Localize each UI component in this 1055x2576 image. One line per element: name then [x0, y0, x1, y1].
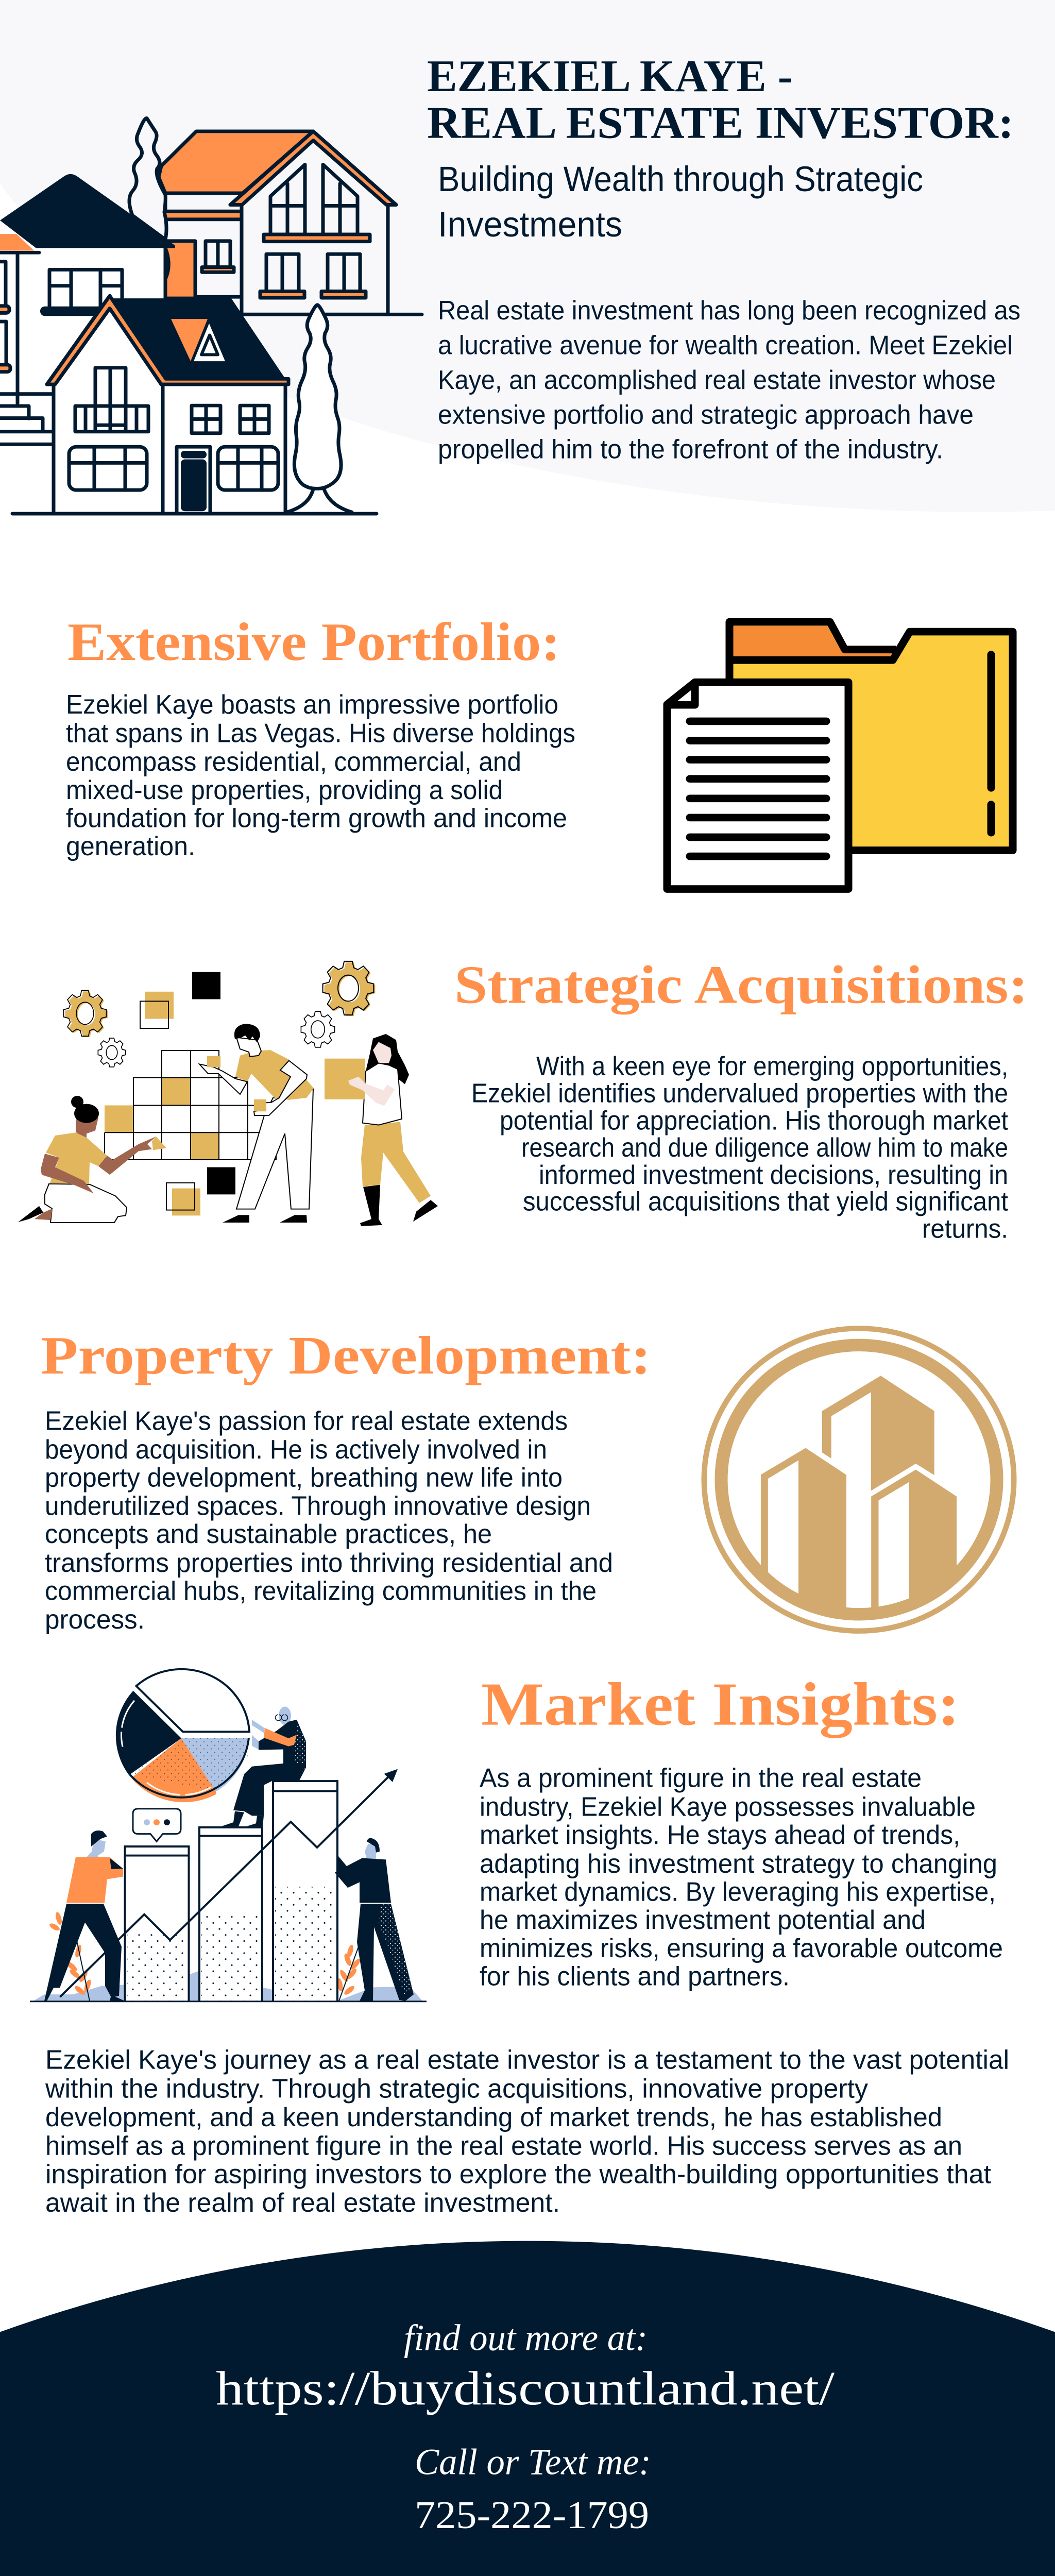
text: property development: property development, breathing new life into	[45, 1463, 563, 1493]
text: strategic acquisitions	[471, 1052, 1008, 1244]
conclusion paragraph: Ezekiel Kaye's journey as a real estate investor is a testament to the vast potential	[45, 2045, 1009, 2075]
text: extensive portfolio: generation.	[66, 832, 195, 861]
intro paragraph: Real estate investment has long been recognized as	[438, 296, 1020, 326]
heading: property development: Property Development:	[41, 1326, 651, 1385]
heading: market insights: Market Insights:	[481, 1671, 960, 1738]
sitting man	[222, 1706, 306, 1826]
left house with navy roof	[0, 174, 175, 444]
title: REAL ESTATE INVESTOR:	[427, 98, 1014, 148]
icon: folder and document	[667, 622, 1013, 889]
bar columns	[30, 1781, 427, 2002]
block grid	[105, 1050, 276, 1160]
heading: extensive portfolio: Extensive Portfolio:	[67, 612, 560, 672]
pie chart	[117, 1669, 249, 1802]
intro paragraph: Kaye, an accomplished real estate investor whose	[438, 365, 996, 395]
conclusion paragraph: inspiration for aspiring investors to explore the wealth-building opportunities that	[45, 2160, 991, 2189]
text: extensive portfolio: foundation for long-term growth and income	[66, 804, 567, 833]
text: property development: process.	[45, 1605, 145, 1635]
text: market insights: market dynamics. By leveraging his expertise,	[480, 1877, 996, 1907]
illustration: houses	[0, 118, 422, 514]
text: strategic acquisitions: With a keen eye for emerging opportunities,	[536, 1052, 1008, 1081]
conclusion paragraph	[45, 2045, 1009, 2218]
text: extensive portfolio: encompass residential, commercial, and	[66, 748, 521, 777]
text: market insights: market insights. He stays ahead of trends,	[480, 1821, 960, 1850]
footer text: phone number: 725-222-1799	[415, 2493, 649, 2537]
illustration: team building blocks	[18, 961, 438, 1226]
text: extensive portfolio: that spans in Las Vegas. His diverse holdings	[66, 719, 575, 748]
left man	[44, 1831, 125, 2001]
text: strategic acquisitions: returns.	[922, 1214, 1008, 1244]
speech bubble	[133, 1809, 181, 1841]
subtitle	[438, 159, 923, 244]
text: market insights: minimizes risks, ensuring a favorable outcome	[480, 1934, 1003, 1963]
footer panel	[0, 2241, 1055, 2576]
front tree	[294, 305, 341, 488]
text: market insights: for his clients and partners.	[480, 1962, 790, 1991]
footer text: website url: https://buydiscountland.net/	[216, 2361, 835, 2415]
front house	[47, 296, 288, 514]
text: strategic acquisitions: potential for appreciation. His thorough market	[500, 1106, 1008, 1136]
intro paragraph: a lucrative avenue for wealth creation. Meet Ezekiel	[438, 331, 1013, 360]
conclusion paragraph: himself as a prominent figure in the real estate world. His success serves as an	[45, 2131, 962, 2161]
text: property development: underutilized spaces. Through innovative design	[45, 1492, 591, 1521]
text: strategic acquisitions: successful acquisitions that yield significant	[523, 1187, 1008, 1216]
text: property development: beyond acquisition. He is actively involved in	[45, 1435, 547, 1465]
back house with orange roof	[159, 131, 422, 314]
intro paragraph	[438, 296, 1020, 465]
arrow: rising trend line	[60, 1769, 398, 1997]
text: property development: commercial hubs, revitalizing communities in the	[45, 1577, 597, 1606]
text: property development: Ezekiel Kaye's passion for real estate extends	[45, 1406, 568, 1436]
floating squares	[140, 972, 235, 1215]
kneeling woman	[18, 1096, 166, 1223]
gears	[64, 961, 375, 1067]
right man	[335, 1838, 414, 2001]
text: market insights: As a prominent figure in the real estate	[480, 1764, 922, 1793]
text: property development: concepts and sustainable practices, he	[45, 1520, 492, 1549]
intro paragraph: propelled him to the forefront of the industry.	[438, 435, 943, 465]
title	[427, 52, 1014, 148]
text: extensive portfolio	[66, 690, 575, 861]
illustration: market chart with people	[30, 1669, 427, 2002]
footer text: find out more: find out more at:	[404, 2317, 648, 2358]
text: market insights: he maximizes investment potential and	[480, 1906, 926, 1935]
text: property development: transforms properties into thriving residential and	[45, 1548, 613, 1578]
text: market insights: adapting his investment strategy to changing	[480, 1849, 997, 1879]
heading: strategic acquisitions: Strategic Acquisitions:	[454, 955, 1028, 1014]
subtitle: Building Wealth through Strategic	[438, 159, 923, 199]
text: market insights	[480, 1764, 1003, 1991]
standing woman	[325, 1034, 438, 1226]
text: strategic acquisitions: informed investment decisions, resulting in	[539, 1160, 1008, 1190]
conclusion paragraph: within the industry. Through strategic acquisitions, innovative property	[45, 2074, 869, 2104]
text: property development	[45, 1406, 613, 1635]
subtitle: Investments	[438, 205, 622, 244]
title: EZEKIEL KAYE -	[427, 52, 793, 101]
text: strategic acquisitions: Ezekiel identifies undervalued properties with the	[471, 1079, 1008, 1109]
standing man	[199, 1024, 314, 1223]
ground hills	[33, 1971, 422, 2001]
conclusion paragraph: await in the realm of real estate investment.	[45, 2189, 560, 2218]
icon: buildings logo	[704, 1328, 1014, 1631]
back tree	[129, 118, 166, 240]
plants	[48, 1911, 362, 2001]
text: extensive portfolio: Ezekiel Kaye boasts an impressive portfolio	[66, 690, 558, 720]
text: extensive portfolio: mixed-use properties, providing a solid	[66, 775, 503, 805]
intro paragraph: extensive portfolio and strategic approach have	[438, 400, 974, 430]
conclusion paragraph: development, and a keen understanding of market trends, he has established	[45, 2103, 942, 2132]
text: market insights: industry, Ezekiel Kaye possesses invaluable	[480, 1792, 976, 1822]
footer text: call or text: Call or Text me:	[415, 2442, 651, 2483]
